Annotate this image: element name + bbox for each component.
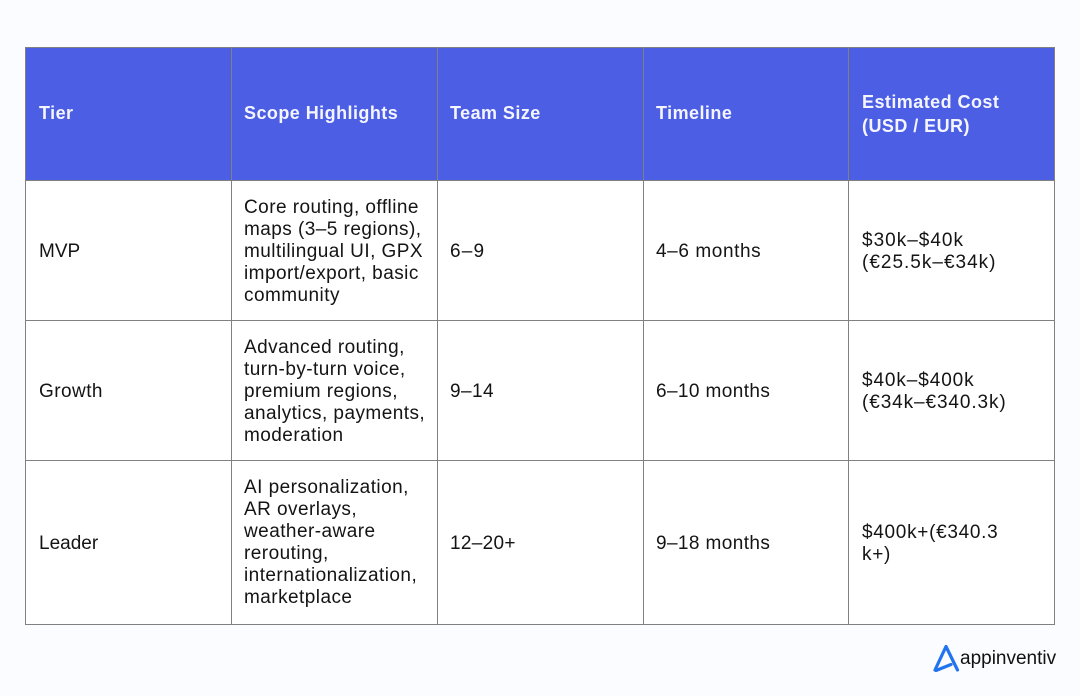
Leader scope: marketplace — [244, 587, 352, 608]
Leader timeline: 9–18 months — [656, 533, 770, 554]
MVP scope — [244, 197, 423, 306]
Leader scope: AR overlays, — [244, 499, 357, 520]
Leader cost: $400k+(€340.3 — [862, 522, 998, 543]
MVP scope: multilingual UI, GPX — [244, 241, 423, 262]
MVP tier: MVP — [39, 241, 80, 262]
Growth team size: 9–14 — [450, 381, 494, 402]
MVP scope: maps (3–5 regions), — [244, 219, 422, 240]
heading: Estimated Cost: (USD / EUR) — [862, 116, 970, 136]
MVP cost: $30k–$40k — [862, 230, 964, 251]
Leader cost: k+) — [862, 544, 891, 565]
header row background — [25, 47, 1055, 181]
heading: Estimated Cost — [862, 92, 999, 136]
MVP cost — [862, 230, 996, 273]
Leader scope: internationalization, — [244, 565, 417, 586]
Growth cost: (€34k–€340.3k) — [862, 392, 1007, 413]
MVP cost: (€25.5k–€34k) — [862, 252, 996, 273]
heading: Estimated Cost: Estimated Cost — [862, 92, 999, 112]
Leader scope: rerouting, — [244, 543, 329, 564]
MVP scope: import/export, basic — [244, 263, 419, 284]
heading: Scope Highlights: Scope Highlights — [244, 103, 398, 123]
MVP team size: 6–9 — [450, 241, 485, 262]
logo: appinventiv — [933, 644, 1056, 672]
MVP scope: Core routing, offline — [244, 197, 419, 218]
MVP timeline: 4–6 months — [656, 241, 761, 262]
Leader scope: AI personalization, — [244, 477, 409, 498]
Leader tier: Leader — [39, 533, 98, 554]
Growth scope: Advanced routing, — [244, 337, 405, 358]
heading: Timeline: Timeline — [656, 103, 732, 123]
icon: logo arrow — [933, 644, 960, 672]
MVP scope: community — [244, 285, 340, 306]
table — [25, 47, 1055, 625]
Growth scope: moderation — [244, 425, 344, 446]
Growth scope: premium regions, — [244, 381, 398, 402]
Growth cost — [862, 370, 1007, 413]
Growth scope — [244, 337, 425, 446]
Leader scope: weather-aware — [244, 521, 376, 542]
heading: Team Size: Team Size — [450, 103, 541, 123]
Leader scope — [244, 477, 417, 608]
Growth cost: $40k–$400k — [862, 370, 975, 391]
Growth scope: analytics, payments, — [244, 403, 425, 424]
Leader team size: 12–20+ — [450, 533, 516, 554]
logo wordmark: appinventiv — [960, 648, 1056, 669]
Growth tier: Growth — [39, 381, 103, 402]
heading: Tier: Tier — [39, 103, 74, 123]
Growth timeline: 6–10 months — [656, 381, 770, 402]
Leader cost — [862, 522, 998, 565]
Growth scope: turn-by-turn voice, — [244, 359, 406, 380]
